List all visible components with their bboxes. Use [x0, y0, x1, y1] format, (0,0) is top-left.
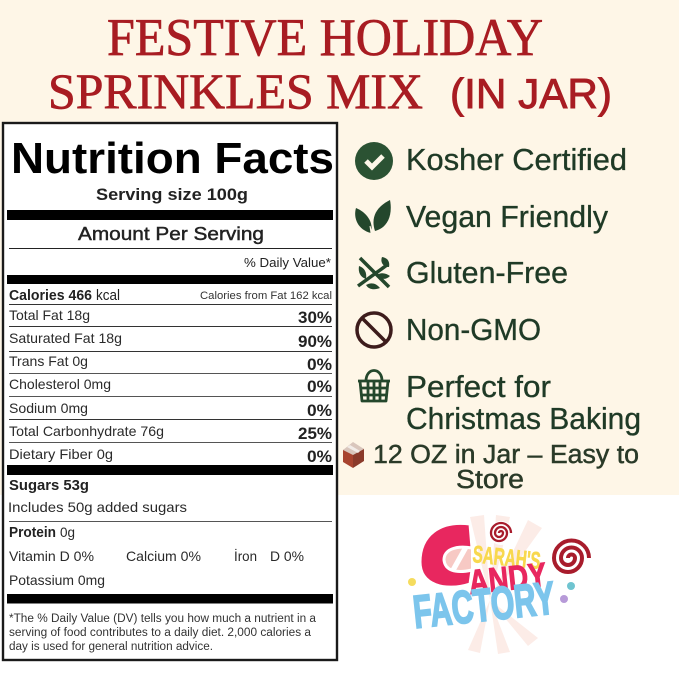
logo candy: ANDY: [467, 556, 549, 602]
logo factory: FACTORY: [411, 571, 557, 638]
sodium row: 0%: [307, 402, 332, 420]
logo sun rays: [468, 515, 542, 654]
vitamins row: D 0%: [270, 548, 304, 564]
total carbohydrate row: 25%: [298, 425, 332, 443]
title: [48, 9, 612, 119]
dietary fiber row: Dietary Fiber 0g: [9, 446, 113, 462]
calories row: kcal: [96, 288, 120, 304]
dietary fiber row: [9, 446, 332, 466]
logo dots: [408, 578, 575, 603]
logo big lollipop: [551, 538, 591, 578]
gluten-free label: Gluten-Free: [406, 256, 568, 290]
vitamins row: Vitamin D 0%: [9, 548, 94, 564]
total fat row: 30%: [298, 309, 332, 327]
serving size: Serving size 100g: [96, 185, 248, 204]
daily value header: % Daily Value*: [244, 256, 331, 270]
12 oz in jar label: Store: [456, 466, 524, 494]
nutrition heading: Nutrition Facts: [11, 134, 334, 183]
icon: no symbol: [357, 313, 391, 347]
trans fat row: [9, 353, 332, 374]
total fat row: Total Fat 18g: [9, 307, 90, 323]
icon: kosher check: [355, 142, 393, 180]
saturated fat row: 90%: [298, 333, 332, 351]
perfect for christmas baking label: Christmas Baking: [406, 402, 641, 436]
footnote: [9, 613, 317, 653]
sodium row: [9, 400, 332, 420]
cholesterol row: 0%: [307, 378, 332, 396]
cholesterol row: [9, 376, 332, 396]
total fat row: [9, 307, 332, 327]
logo: sarah's candy factory: [408, 515, 591, 654]
saturated fat row: Saturated Fat 18g: [9, 330, 122, 346]
total carbohydrate row: Total Carbonhydrate 76g: [9, 423, 164, 439]
perfect for christmas baking label: Perfect for: [406, 370, 551, 404]
vitamins row: İron: [234, 547, 257, 564]
calories row: [9, 288, 332, 304]
panel: nutrition facts: [3, 123, 337, 660]
icon: box: [343, 442, 364, 468]
potassium row: Potassium 0mg: [9, 572, 105, 588]
saturated fat row: [9, 330, 332, 351]
12 oz in jar label: [373, 441, 639, 494]
vitamins row: [9, 547, 304, 564]
dietary fiber row: 0%: [307, 448, 332, 466]
total carbohydrate row: [9, 423, 332, 443]
logo big C: [420, 523, 472, 587]
footnote: serving of food contributes to a daily diet. 2,000 calories a: [9, 627, 312, 639]
calories row: Calories from Fat 162 kcal: [200, 290, 332, 302]
kosher certified label: Kosher Certified: [406, 143, 627, 177]
trans fat row: Trans Fat 0g: [9, 353, 88, 369]
calories row: Calories 466: [9, 288, 92, 304]
icon: gluten free: [358, 257, 390, 289]
logo sarah's: SARAH'S: [471, 541, 542, 575]
title: (IN JAR): [450, 70, 612, 117]
title: FESTIVE HOLIDAY: [107, 9, 543, 67]
trans fat row: 0%: [307, 356, 332, 374]
icon: vegan leaves: [355, 200, 391, 233]
protein row: Protein: [9, 525, 56, 541]
icon: basket: [358, 370, 390, 401]
12 oz in jar label: 12 OZ in Jar – Easy to: [373, 441, 639, 469]
vitamins row: Calcium 0%: [126, 548, 201, 564]
added sugars row: Includes 50g added sugars: [8, 499, 187, 515]
vegan friendly label: Vegan Friendly: [406, 200, 609, 234]
footnote: *The % Daily Value (DV) tells you how much a nutrient in a: [9, 613, 317, 625]
non-gmo label: Non-GMO: [406, 313, 541, 347]
protein row: 0g: [60, 524, 75, 540]
sugars row: Sugars 53g: [9, 478, 89, 494]
footnote: day is used for general nutrition advice.: [9, 641, 213, 653]
cholesterol row: Cholesterol 0mg: [9, 376, 111, 392]
logo small lollipop: [489, 521, 513, 545]
perfect for christmas baking label: [406, 370, 641, 436]
sodium row: Sodium 0mg: [9, 400, 88, 416]
title: SPRINKLES MIX: [48, 63, 423, 119]
amount per serving: Amount Per Serving: [78, 223, 264, 244]
